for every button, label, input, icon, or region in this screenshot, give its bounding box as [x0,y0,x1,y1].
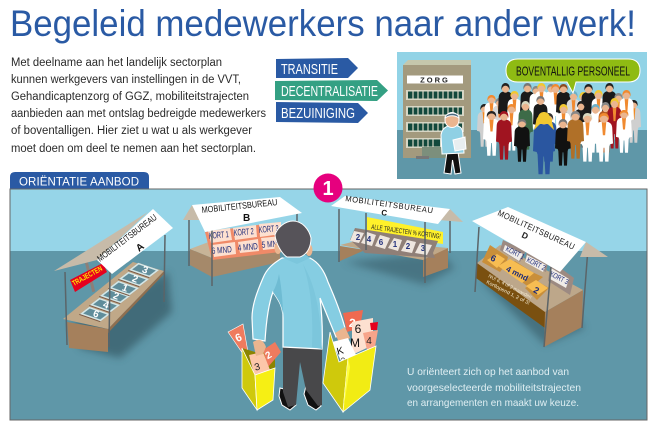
red sign: trajecten: TRAJECTEN [71,264,104,288]
shopping bag right: 3 [340,356,347,366]
man: head [274,221,312,257]
man: shoes and trousers [279,346,322,410]
market stall C [331,194,463,285]
caption text: U oriënteert zich op het aanbod van [407,366,569,378]
intro text block: of boventalligen. Hier ziet u wat u als werkgever [11,125,252,137]
arrow tag: transitie: TRANSITIE [281,61,338,78]
arrow tag: decentralisatie [275,80,388,101]
panel: orientatie aanbod [10,172,647,420]
market stall B [183,197,302,286]
intro text block: aanbieden aan met ontslag bedreigde medewerkers [11,108,266,120]
table cards C: 4 [367,235,372,244]
table cards A: 2 [111,291,121,303]
shopping bag left: 3 [253,361,262,374]
caption text: en arrangementen en maakt uw keuze. [407,397,579,409]
table cards D: 2 [532,285,541,296]
table cards A: 6 [91,309,101,321]
shopping bag left: 6 [233,332,244,345]
table cards D: KORT 2 [525,255,547,272]
crowd of staff [477,83,641,174]
intro text block [11,57,266,155]
market stall D: NU! 6, 4 of 2 maanden [487,273,533,301]
table cards A: 2 [130,274,140,286]
market stall C: C [381,208,388,218]
arrow tag: bezuiniging: BEZUINIGING [281,105,355,122]
market stall A: MOBILITEITSBUREAU [95,212,159,264]
arrow tag: decentralisatie: DECENTRALISATIE [281,83,378,100]
table cards D: KORT 1 [504,244,526,261]
table cards B: 4 MND [237,241,258,253]
table cards A [79,263,159,322]
shopping bag right: 2 [348,316,357,330]
table cards D: KORT 3 [548,269,570,286]
man with shopping bags [228,221,378,412]
man: shirt [252,255,345,349]
table cards C: 6 [379,238,384,247]
table cards B [208,222,282,257]
step number badge [314,174,342,202]
table cards C: 2 [356,233,361,242]
table cards C: 2 [406,242,411,251]
speech bubble [506,59,640,93]
building: zorg [403,60,471,159]
panel tab [10,172,149,189]
illustration: boventallig personeel [397,52,647,179]
table cards C: 1 [393,240,398,249]
table cards D: 4 mnd [505,264,530,283]
person: doctor with folder [441,112,466,174]
table cards B: KORT 1 [208,229,229,241]
caption text: voorgeselecteerde mobiliteitstrajecten [407,382,581,394]
market stall A: A [134,241,147,254]
intro text block: Met deelname aan het landelijk sectorplan [11,57,222,69]
intro text block: Gehandicaptenzorg of GGZ, mobiliteitstrajecten [11,91,249,103]
table cards B: 6 MND [211,244,232,256]
table cards A: 4 [101,300,111,312]
shopping bag left [228,324,281,410]
shopping bag right: 6 [355,322,362,336]
market stall D: Kortlopend 1, 2 of 3! [485,279,531,307]
market stall B: MOBILITEITSBUREAU [201,197,278,215]
building: zorg: ZORG [420,76,450,84]
market stall D: MOBILITEITSBUREAU [496,208,577,252]
table cards B: 5 MND [261,238,282,250]
table cards A: 3 [140,265,150,277]
table cards B: KORT 3 [258,223,279,235]
table cards C: 3 [421,244,426,253]
shopping bag right [323,310,378,412]
table cards C [350,228,438,258]
shopping bag right: 4 [366,336,372,347]
market stall A [54,209,173,358]
shopping bag right: K [336,345,345,358]
market stall C: MOBILITEITSBUREAU [345,194,434,215]
shopping bag right: M [350,336,360,350]
caption text [407,366,581,409]
shopping bag left: 2 [264,349,274,362]
panel tab: ORIËNTATIE AANBOD [19,176,139,188]
intro text block: moet doen om deel te nemen aan het sectorplan. [11,143,256,155]
title: Begeleid medewerkers naar ander werk! [10,3,636,44]
market stall B: B [243,213,250,224]
table cards A: 1 [120,283,130,295]
table cards B: KORT 2 [233,226,254,238]
table cards D: 6 [489,253,498,264]
table cards D [482,240,574,300]
yellow banner: ALLE TRAJECTEN % KORTING! [371,224,441,241]
market stall D: D [520,230,530,241]
intro text block: kunnen werkgevers van instellingen in de VVT, [11,74,241,86]
market stall D [472,207,608,347]
red sign: trajecten [70,263,107,292]
step number badge: 1 [322,178,334,200]
